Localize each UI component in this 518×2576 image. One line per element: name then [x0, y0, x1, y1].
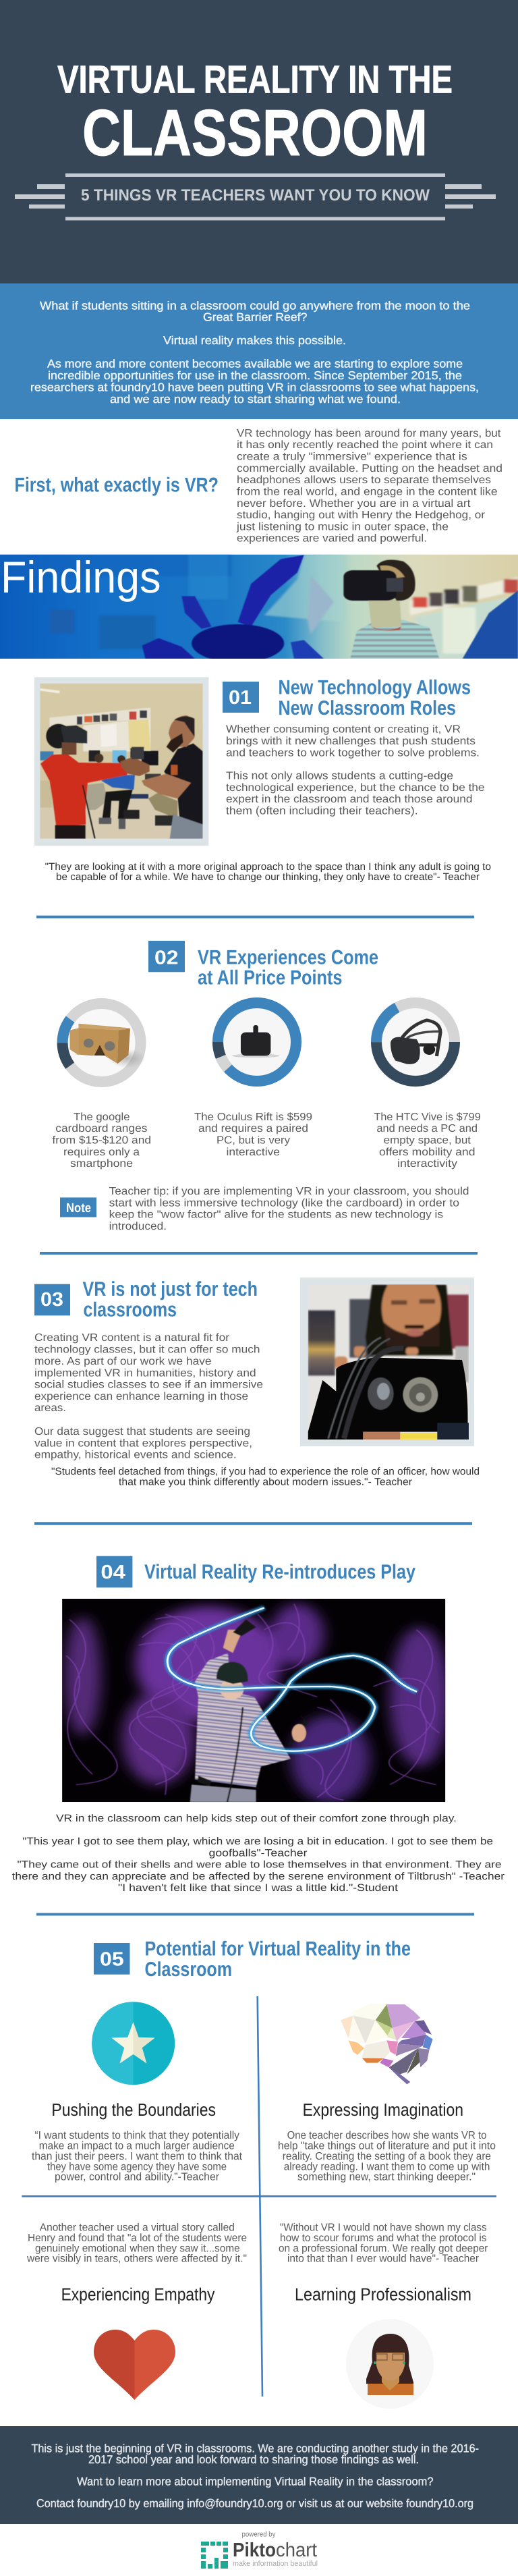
definition text: just listening to music in outer space, the — [236, 522, 449, 533]
body text 01: expert in the classroom and teach those around — [226, 794, 472, 805]
caption: vive — [374, 1112, 481, 1170]
body text 01: This not only allows students a cutting-edge — [226, 771, 453, 782]
quotes 04: there and they can appreciate and be affected by the serene environment of Tiltbrush" -Teacher — [12, 1871, 505, 1882]
block: experiencing empathy: were visibly in tears, others were affected by it." — [26, 2253, 247, 2265]
footer text: Contact foundry10 by emailing info@foundry10.org or visit us at our website foundry10.org — [36, 2497, 473, 2510]
body text 03: Creating VR content is a natural fit for — [34, 1332, 230, 1344]
caption: oculus: PC, but is very — [217, 1134, 290, 1146]
caption: vive: interactivity — [397, 1158, 457, 1170]
block: learning professionalism: on a professional forum. We really got deeper — [279, 2243, 488, 2254]
chart: google cardboard price ring — [63, 1004, 146, 1082]
panel: section 02 — [52, 941, 481, 1232]
heading: First, what exactly is VR? — [15, 474, 219, 497]
block: expressing imagination: One teacher describes how she wants VR to — [287, 2130, 487, 2141]
panel: what is VR — [15, 428, 502, 544]
teacher tip: start with less immersive technology (like the cardboard) in order to — [109, 1197, 459, 1209]
body text 01: Whether consuming content or creating it, VR — [226, 724, 461, 736]
body text 03: empathy, historical events and science. — [34, 1450, 237, 1461]
block: experiencing empathy: genuinely emotional when they saw it...some — [35, 2243, 240, 2254]
block: expressing imagination: something new, start thinking deeper." — [297, 2172, 476, 2183]
icon: star badge — [92, 2002, 175, 2085]
logo: piktochart credit: powered by — [241, 2530, 276, 2538]
photo: man holding headset — [300, 1270, 474, 1446]
caption: cardboard: The google — [74, 1112, 130, 1123]
heading 01: New Classroom Roles — [278, 697, 456, 719]
block: learning professionalism: how to scour forums and what the protocol is — [280, 2232, 487, 2244]
body text 03: implemented VR in humanities, history and — [34, 1367, 256, 1379]
definition text: from the real world, and engage in the content like — [237, 487, 498, 498]
number badge 04: 04 — [100, 1562, 125, 1583]
definition text: create a truly "immersive" experience that is — [237, 451, 467, 463]
number badge 01: 01 — [229, 687, 252, 709]
block: learning professionalism: into that than I ever would have"- Teacher — [287, 2253, 480, 2265]
heading 05 — [144, 1938, 411, 1981]
teacher tip: introduced. — [109, 1221, 167, 1232]
heading 02 — [198, 946, 378, 989]
block: experiencing empathy: Henry and found that "a lot of the students were — [28, 2232, 247, 2244]
footer text: Want to learn more about implementing Virtual Reality in the classroom? — [77, 2475, 434, 2488]
body text 01: brings with it new challenges that push students — [226, 736, 476, 747]
title — [57, 58, 453, 169]
quote 03: "Students feel detached from things, if you had to experience the role of an officer, how would — [51, 1466, 480, 1477]
definition text: experiences are varied and powerful. — [237, 533, 427, 544]
definition text: studio, hanging out with Henry the Hedgehog, or — [237, 510, 486, 521]
quotes 04: "This year I got to see them play, which we are losing a bit in education. I got to see them be — [22, 1836, 493, 1847]
logo: piktochart credit: Pikto — [233, 2540, 276, 2561]
heading 02: at All Price Points — [198, 967, 343, 989]
teacher tip: Teacher tip: if you are implementing VR in your classroom, you should — [109, 1186, 469, 1197]
quotes 04: goofballs"-Teacher — [209, 1847, 308, 1859]
intro text: Virtual reality makes this possible. — [163, 334, 346, 347]
subtitle ribbon — [15, 173, 496, 220]
body text 01: and teachers to work together to solve problems. — [226, 747, 480, 759]
number badge 01 — [223, 682, 259, 713]
heading 02: VR Experiences Come — [198, 946, 378, 969]
heading 05: Potential for Virtual Reality in the — [144, 1938, 411, 1961]
body text 03: value in content that explores perspective, — [34, 1437, 252, 1449]
body text 01 — [226, 724, 485, 817]
definition text: VR technology has been around for many years, but — [237, 428, 501, 439]
block: pushing the boundaries — [32, 2100, 243, 2183]
panel: section 01 — [34, 677, 491, 883]
block: pushing the boundaries: make an impact to a much larger audience — [39, 2141, 235, 2152]
caption: cardboard: requires only a — [63, 1147, 140, 1158]
definition text: headphones allows users to separate themselves — [237, 474, 491, 486]
quote 03 — [51, 1466, 480, 1488]
caption: vive: and needs a PC and — [376, 1123, 478, 1134]
heading 05: Classroom — [144, 1958, 232, 1981]
quote 01: be capable of for a while. We have to change our thinking, they only have to create"- Teacher — [56, 871, 480, 883]
footer text: This is just the beginning of VR in classrooms. We are conducting another study in the 2016- — [31, 2442, 479, 2455]
panel: header — [0, 0, 518, 283]
intro text: incredible opportunities for use in the classroom. Since September 2015, the — [48, 369, 462, 382]
quote 01: "They are looking at it with a more original approach to the space than I think any adult is going to — [45, 861, 491, 873]
teacher tip: keep the "wow factor" alive for the students as new technology is — [109, 1209, 443, 1221]
caption: vive: offers mobility and — [379, 1147, 475, 1158]
definition text — [236, 428, 502, 544]
logo: piktochart credit: chart — [276, 2540, 317, 2561]
block: expressing imagination — [278, 2100, 496, 2183]
number badge 04 — [96, 1556, 132, 1587]
title: CLASSROOM — [82, 96, 428, 169]
caption: oculus — [194, 1112, 312, 1158]
caption: cardboard: smartphone — [70, 1158, 133, 1170]
number badge 03: 03 — [40, 1289, 63, 1311]
block: expressing imagination: help "take things out of literature and put it into — [278, 2141, 496, 2152]
block: experiencing empathy: Another teacher used a virtual story called — [40, 2222, 235, 2234]
block: pushing the boundaries: power, control and ability.”-Teacher — [55, 2172, 220, 2183]
block: pushing the boundaries: Pushing the Boundaries — [51, 2100, 216, 2120]
caption: oculus: The Oculus Rift is $599 — [194, 1112, 312, 1123]
quote 03: that make you think differently about modern issues."- Teacher — [119, 1477, 412, 1488]
block: pushing the boundaries: “I want students to think that they potentially — [34, 2130, 239, 2141]
quotes 04: "I haven't felt like that since I was a little kid."-Student — [118, 1882, 399, 1894]
heading 04: Virtual Reality Re-introduces Play — [144, 1561, 415, 1583]
body text 03: areas. — [34, 1402, 66, 1414]
number badge 03 — [34, 1284, 70, 1315]
caption: vive: empty space, but — [384, 1134, 471, 1146]
block: learning professionalism — [279, 2222, 488, 2304]
chart: htc vive price ring — [376, 1003, 455, 1081]
logo: piktochart credit — [201, 2530, 318, 2569]
footer text: 2017 school year and look forward to sharing those findings as well. — [88, 2453, 419, 2466]
number badge 05: 05 — [100, 1949, 124, 1971]
photo: student with headset and teacher — [34, 677, 208, 846]
caption: cardboard: cardboard ranges — [55, 1123, 147, 1134]
footer text — [31, 2442, 479, 2510]
heading: findings: Findings — [1, 552, 161, 602]
block: pushing the boundaries: they have some agency they have some — [47, 2161, 227, 2172]
block: pushing the boundaries: than just their peers. I want them to think that — [32, 2151, 243, 2162]
caption: oculus: and requires a paired — [198, 1123, 308, 1134]
logo: piktochart credit: make information beautiful — [233, 2560, 318, 2568]
quote 01 — [45, 861, 491, 883]
icon: heart — [94, 2330, 175, 2400]
block: learning professionalism: Learning Professionalism — [295, 2284, 471, 2304]
caption 04: VR in the classroom can help kids step out of their comfort zone through play. — [56, 1813, 457, 1824]
number badge 02: 02 — [154, 948, 178, 969]
teacher tip — [109, 1186, 469, 1232]
heading 03: classrooms — [84, 1299, 177, 1321]
panel: section 03 — [34, 1270, 480, 1488]
panel: introduction — [0, 283, 518, 419]
panel: section 04 — [12, 1556, 505, 1894]
icon: oculus sensor — [232, 1025, 279, 1058]
caption: vive: The HTC Vive is $799 — [374, 1112, 481, 1123]
number badge 05 — [94, 1943, 130, 1975]
definition text: it has only recently reached the point where it can — [237, 439, 493, 451]
definition text: never before. Whether you are in a virtual art — [237, 498, 471, 510]
intro text: Great Barrier Reef? — [203, 310, 308, 323]
heading 01: New Technology Allows — [278, 677, 471, 699]
body text 03 — [34, 1332, 263, 1461]
block: expressing imagination: Expressing Imagination — [303, 2100, 463, 2120]
intro text: and we are now ready to start sharing what we found. — [110, 393, 401, 406]
icon: piktochart mark — [201, 2542, 228, 2569]
intro text — [30, 300, 479, 406]
quotes 04: "They came out of their shells and were able to lose themselves in that environment. They are — [18, 1859, 502, 1871]
caption: cardboard: from $15-$120 and — [52, 1134, 151, 1146]
block: experiencing empathy: Experiencing Empathy — [61, 2284, 214, 2304]
body text 03: social studies classes to see if an immersive — [34, 1379, 263, 1391]
body text 03: Our data suggest that students are seeing — [34, 1426, 250, 1437]
block: expressing imagination: reality. Creating the setting of a book they are — [283, 2151, 491, 2162]
panel: section 05 — [22, 1938, 496, 2409]
heading 03: VR is not just for tech — [82, 1278, 258, 1300]
note badge — [60, 1197, 96, 1217]
note badge: Note — [66, 1201, 91, 1215]
heading 01 — [278, 677, 471, 719]
chart: oculus rift price ring — [218, 1003, 296, 1081]
heading 03 — [82, 1278, 258, 1321]
intro text: As more and more content becomes available we are starting to explore some — [47, 358, 463, 371]
icon: teacher avatar — [346, 2319, 434, 2409]
banner: findings — [0, 552, 518, 663]
caption: cardboard — [52, 1112, 151, 1170]
body text 03: more. As part of our work we have — [34, 1356, 212, 1367]
caption: oculus: interactive — [227, 1147, 280, 1158]
photo: student painting in VR — [62, 1599, 449, 1803]
icon: vive headset — [391, 1020, 440, 1064]
number badge 02 — [148, 941, 185, 972]
block: learning professionalism: "Without VR I would not have shown my class — [280, 2222, 487, 2234]
definition text: commercially available. Putting on the headset and — [237, 463, 502, 474]
panel: footer — [0, 2426, 518, 2524]
body text 01: technological experience, but the chance to be the — [226, 782, 485, 794]
intro text: What if students sitting in a classroom could go anywhere from the moon to the — [40, 300, 470, 312]
body text 03: technology classes, but it can offer so much — [34, 1344, 260, 1356]
intro text: researchers at foundry10 have been putting VR in classrooms to see what happens, — [30, 381, 479, 394]
block: experiencing empathy — [26, 2222, 247, 2304]
body text 01: them (often including their teachers). — [226, 806, 418, 817]
icon: polygon brain — [341, 2003, 433, 2084]
body text 03: experience can enhance learning in those — [34, 1391, 248, 1402]
block: expressing imagination: already reading. I want them to come up with — [284, 2161, 490, 2172]
quotes 04 — [12, 1836, 505, 1894]
subtitle ribbon: 5 THINGS VR TEACHERS WANT YOU TO KNOW — [81, 186, 430, 204]
icon: cardboard viewer — [70, 1024, 146, 1068]
